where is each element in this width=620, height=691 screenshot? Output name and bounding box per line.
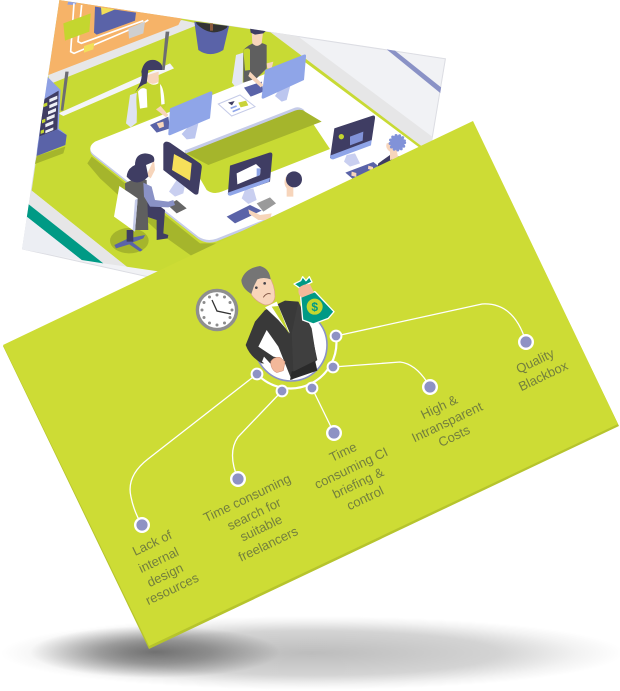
businessman with money bag	[241, 266, 334, 380]
awning with orange panel	[48, 0, 200, 116]
point: high and intransparent costs: High &	[418, 392, 460, 422]
icon: wall clock	[197, 290, 237, 330]
person: man at top desk	[232, 28, 273, 87]
point: time consuming search for suitable freelancers: search for	[225, 494, 284, 533]
point: time consuming CI briefing and control: consuming CI	[312, 444, 390, 492]
point: time consuming search for suitable freelancers: suitable	[238, 512, 285, 544]
keypad wall unit	[35, 76, 67, 164]
businessman head	[241, 266, 275, 305]
point: time consuming CI briefing and control: briefing &	[330, 464, 386, 502]
point: time consuming search for suitable freelancers	[201, 471, 301, 565]
point: lack of internal design resources: internal	[136, 544, 181, 576]
point: high and intransparent costs: Costs	[436, 422, 473, 450]
point: lack of internal design resources: design	[145, 560, 186, 590]
keyboard and blue monitor	[150, 91, 212, 139]
point: time consuming CI briefing and control	[312, 426, 390, 513]
point: high and intransparent costs	[409, 380, 485, 450]
centre monitor and keyboard	[227, 153, 276, 223]
person: man at centre desk	[248, 171, 302, 220]
icon: money bag: $	[311, 300, 318, 314]
connector lines from portrait to points	[130, 304, 526, 525]
point: lack of internal design resources: Lack of	[130, 527, 175, 559]
office desk	[90, 61, 420, 243]
point: quality blackbox: Blackbox	[516, 358, 571, 394]
back card: isometric office illustration	[22, 0, 446, 277]
point: time consuming search for suitable freelancers: freelancers	[236, 523, 301, 565]
portrait circle	[255, 309, 327, 381]
point: lack of internal design resources	[130, 518, 202, 608]
point: time consuming CI briefing and control: Time	[327, 439, 359, 465]
point: quality blackbox: Quality	[514, 345, 557, 376]
point: time consuming search for suitable freelancers: Time consuming	[201, 471, 293, 525]
point: time consuming CI briefing and control: control	[344, 483, 386, 513]
tablet on desk	[218, 95, 255, 116]
right monitor	[330, 116, 375, 167]
ground shadow	[0, 616, 620, 690]
dark monitor with yellow screen	[163, 142, 202, 197]
front green card	[3, 121, 619, 649]
point: high and intransparent costs: Intransparent	[409, 399, 485, 445]
second keyboard and blue monitor	[244, 55, 306, 102]
point: lack of internal design resources: resources	[143, 570, 202, 608]
connector nodes on ring	[252, 331, 341, 396]
businessman body	[246, 301, 317, 380]
person: woman at top desk	[126, 60, 168, 127]
point: quality blackbox	[514, 335, 571, 394]
person: curly haired man with keyboard	[345, 135, 405, 179]
plant pot	[194, 22, 229, 54]
person: seated woman with tablet	[110, 153, 187, 253]
